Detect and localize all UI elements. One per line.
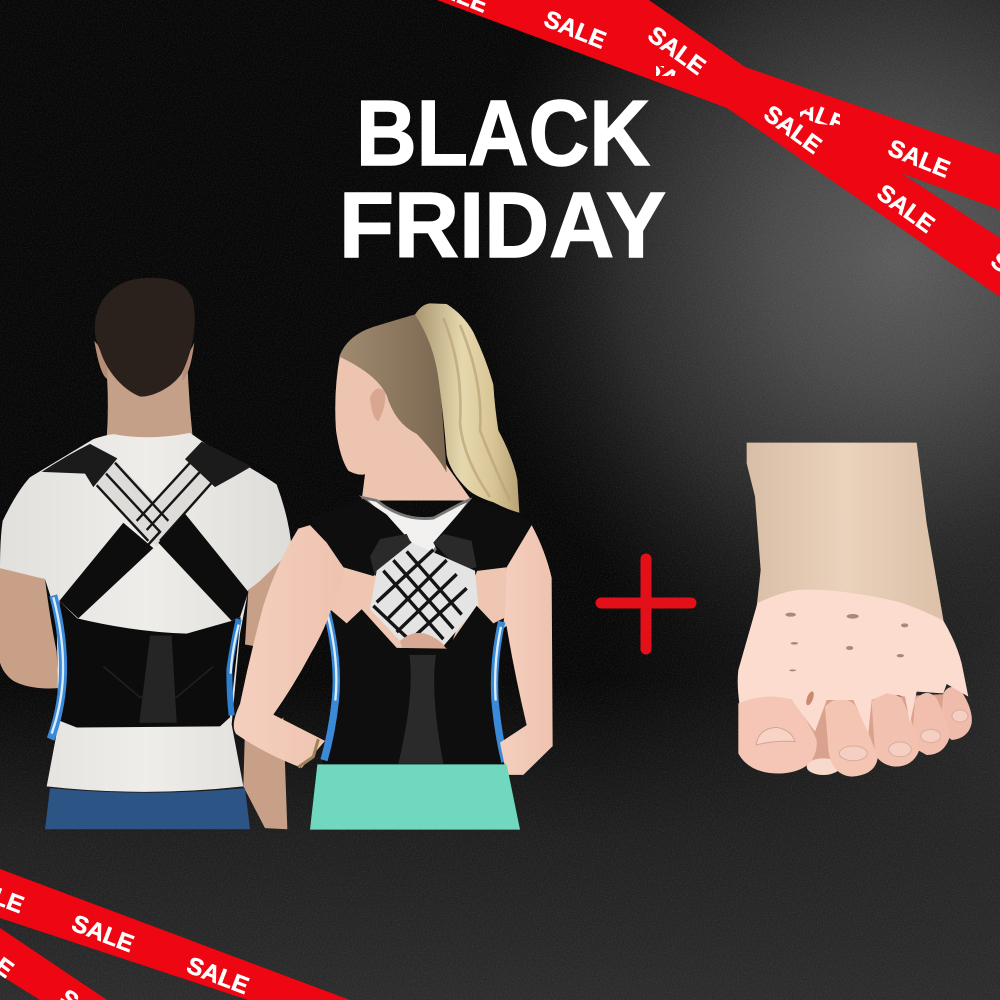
man waist belt (59, 601, 241, 727)
woman lower back gap (400, 633, 447, 651)
woman vest lower (322, 606, 508, 765)
toe 5 (940, 687, 972, 740)
man belt chevron (103, 666, 213, 697)
top right sale ribbons: SALE (641, 52, 708, 112)
other toe nails (839, 710, 968, 761)
toe separator gel pad (738, 590, 968, 733)
top right sale ribbons: SALE (780, 90, 850, 139)
top right sale ribbons: SALE (872, 179, 939, 239)
woman leggings (310, 764, 520, 830)
top right sale ribbons: SALE (540, 6, 610, 55)
woman left arm (234, 525, 344, 768)
woman white top (363, 498, 472, 564)
gel underside (807, 758, 840, 775)
bottom left sale ribbons: SALE (68, 910, 137, 958)
woman wrist bracelet (298, 739, 318, 767)
bottom left sale ribbons (0, 869, 350, 1000)
top right sale ribbons: SALE (884, 135, 954, 184)
big toe (738, 696, 817, 773)
title: BLACK (356, 81, 650, 185)
toe base shadow (753, 693, 960, 767)
image: foot with gel toe separator (738, 443, 972, 777)
woman shoulder pads (370, 534, 477, 576)
title (339, 81, 666, 277)
woman left blue stay (324, 613, 336, 760)
woman ponytail (415, 303, 519, 513)
woman centre panel (398, 655, 443, 764)
man lower straps (59, 514, 248, 621)
man belt centre panel (139, 635, 177, 723)
woman right arm (500, 525, 553, 775)
image: man wearing posture corrector (0, 278, 293, 829)
leg (747, 443, 944, 623)
woman hair (339, 314, 447, 472)
man upper weave strap (96, 460, 213, 546)
woman back skin (327, 557, 510, 658)
woman neck and head skin (335, 355, 472, 501)
man neck (106, 357, 193, 439)
toe 4 (912, 693, 949, 755)
top right sale ribbons: SALE (643, 21, 710, 81)
image: woman wearing posture corrector (234, 303, 553, 830)
plus sign (601, 559, 691, 649)
woman vest upper (310, 499, 532, 576)
woman right blue stay (495, 622, 505, 762)
woman weave (370, 543, 478, 646)
man arms (0, 550, 293, 829)
man t-shirt (0, 433, 292, 792)
woman ear (370, 388, 385, 422)
ponytail strands (443, 318, 510, 501)
man hair (95, 278, 195, 397)
man right blue stay (229, 619, 239, 715)
man left blue stay (51, 595, 63, 739)
big toe nail (756, 727, 795, 745)
toe 3 (872, 693, 919, 767)
man ears (94, 341, 194, 381)
top right sale ribbons (422, 0, 1000, 307)
man jeans (45, 788, 250, 829)
top right sale ribbons: SALE (759, 100, 826, 160)
title: FRIDAY (339, 173, 666, 277)
man shoulder pads (42, 442, 252, 487)
toe 2 (825, 699, 878, 777)
gel holes (785, 613, 908, 706)
bottom left sale ribbons: SALE (183, 952, 252, 1000)
